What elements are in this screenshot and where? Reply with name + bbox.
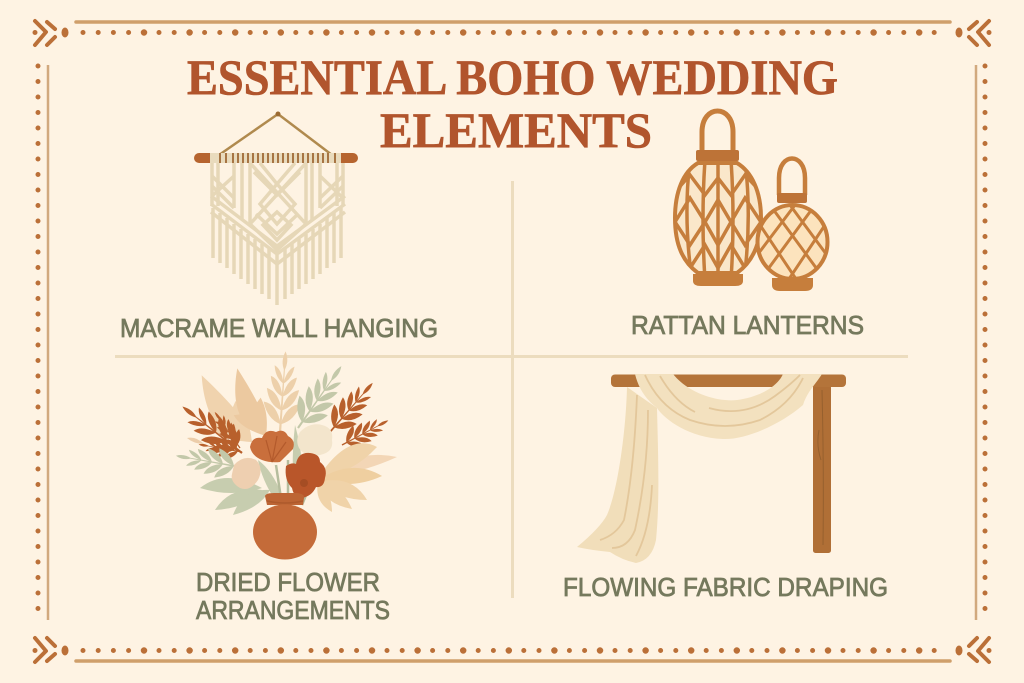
icon: small rattan lantern [756,156,830,291]
flower: pink [232,458,261,489]
label: macrame wall hanging: MACRAME WALL HANGING [120,313,438,343]
flower: rust [286,453,326,498]
icon: big rattan lantern [675,111,761,286]
title: ESSENTIAL BOHO WEDDING [187,49,838,105]
flower: cream [297,424,332,456]
label: dried flower arrangements: ARRANGEMENTS [196,595,390,625]
title [187,49,838,158]
flower: orange [250,431,294,462]
icon: dried flower bouquet [172,350,397,560]
label: dried flower arrangements [196,567,390,625]
panel: flowing fabric draping [563,374,888,602]
title: ELEMENTS [380,102,652,158]
label: dried flower arrangements: DRIED FLOWER [196,567,380,597]
icon: wooden arch with fabric drape [577,374,846,563]
label: flowing fabric draping: FLOWING FABRIC DRAPING [563,572,888,602]
quadrant dividers [115,181,908,598]
panel: dried flower arrangements [172,350,397,625]
label: rattan lanterns: RATTAN LANTERNS [631,310,864,340]
panel: rattan lanterns [631,111,864,340]
icon: macrame wall hanging [194,112,358,305]
panel: macrame wall hanging [120,112,438,343]
